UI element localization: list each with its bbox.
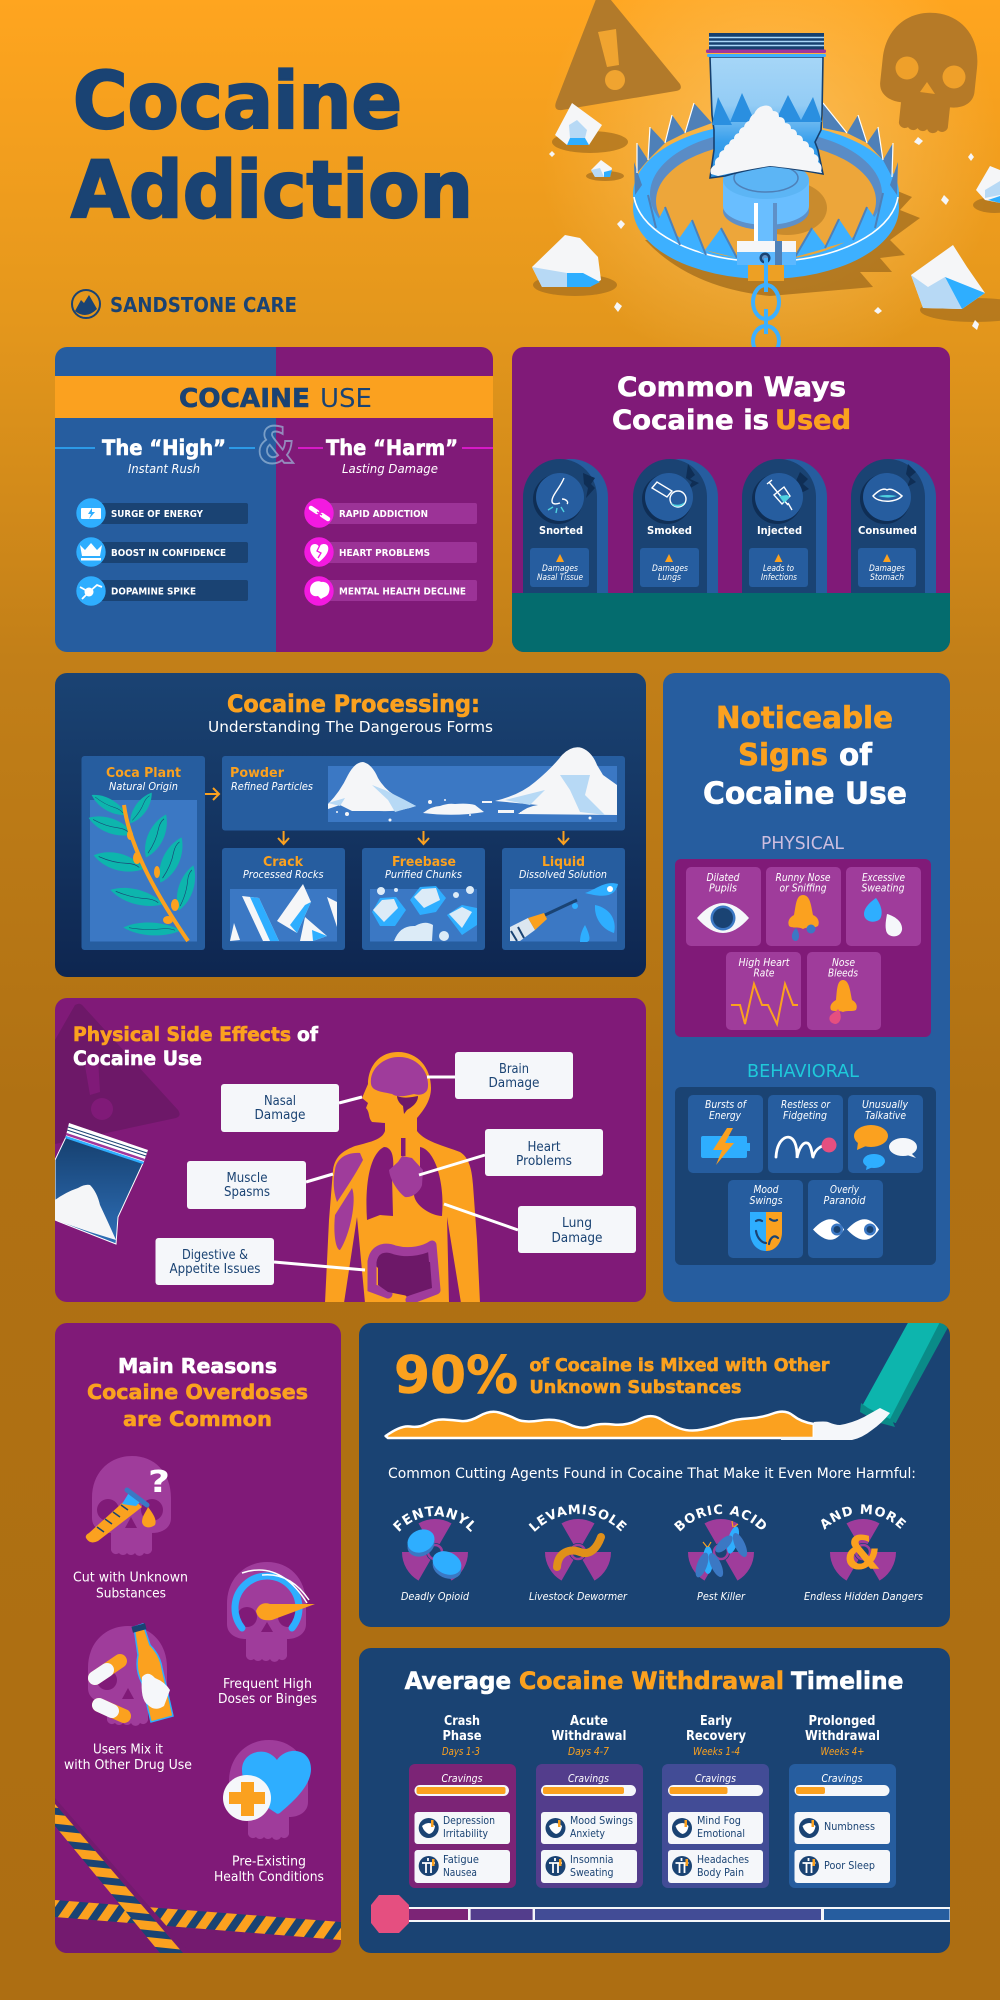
sign: high heart rate: Rate (754, 968, 774, 980)
sign: high heart rate (726, 952, 801, 1030)
card: crack: Processed Rocks (243, 869, 324, 881)
panel: noticeable signs (663, 673, 950, 1302)
sign: runny nose: or Sniffing (780, 882, 827, 894)
card: powder (222, 747, 625, 830)
reason: cut with unknown substances: Cut with Unknown (73, 1570, 188, 1586)
heading: physical side effects: of (297, 1023, 318, 1046)
card: injected: Infections (761, 573, 797, 583)
column: acute withdrawal: Days 4-7 (568, 1746, 609, 1758)
heading: overdose reasons: Cocaine Overdoses (87, 1380, 308, 1404)
sign: mood swings: Mood (754, 1184, 779, 1196)
sign: runny nose (766, 867, 841, 946)
column: crash phase (409, 1714, 516, 1888)
heading: noticeable signs (703, 701, 907, 812)
heading: physical side effects: Cocaine Use (73, 1047, 202, 1070)
illustration: powder line (386, 1408, 890, 1440)
label: nasal damage (221, 1084, 339, 1132)
icon: warning triangle backdrop (555, 0, 681, 110)
column: early recovery: Body Pain (697, 1866, 744, 1879)
agent: and more: Endless Hidden Dangers (804, 1591, 923, 1603)
heading: 90 percent: of Cocaine is Mixed with Other (530, 1355, 830, 1376)
agent: and more: AND MORE (821, 1504, 906, 1530)
column: acute withdrawal: Anxiety (570, 1827, 606, 1840)
icon: cutting straw (860, 1320, 952, 1427)
heading: common ways: Used (775, 405, 851, 436)
column: acute withdrawal (536, 1714, 643, 1888)
heading: overdose reasons (87, 1354, 308, 1431)
heading: common ways (612, 372, 851, 436)
group: physical signs (675, 859, 931, 1037)
group: behavioral signs (675, 1087, 936, 1265)
sign: dilated pupils (686, 867, 761, 946)
column: early recovery: Weeks 1-4 (693, 1746, 740, 1758)
card: consumed: Damages (869, 564, 906, 574)
label: brain damage: Damage (488, 1076, 540, 1091)
label: heart problems (485, 1129, 603, 1176)
column: crash phase: Crash (444, 1714, 480, 1729)
list: high effects: BOOST IN CONFIDENCE (111, 548, 226, 559)
heading: 90 percent: 90% (394, 1346, 518, 1406)
column: crash phase: Days 1-3 (442, 1746, 480, 1758)
heading: common ways: Common Ways (617, 372, 846, 403)
card: liquid: Liquid (542, 855, 585, 870)
column: early recovery: Cravings (695, 1773, 736, 1785)
card: smoked: Damages (652, 564, 689, 574)
heading: the high (55, 436, 255, 476)
heading: 90 percent (394, 1346, 830, 1406)
column: crash phase: Irritability (443, 1827, 489, 1840)
card: snorted (523, 459, 608, 593)
label: nasal damage: Damage (254, 1108, 306, 1123)
card: coca plant: Natural Origin (109, 781, 178, 793)
reason: pre-existing conditions: Health Conditions (214, 1870, 324, 1885)
card: snorted: Nasal Tissue (537, 573, 583, 583)
heading: cocaine use: USE (320, 384, 372, 414)
sign: excessive sweating: Excessive (862, 872, 905, 884)
logo: Sandstone Care (72, 290, 297, 318)
list: harm effects: MENTAL HEALTH DECLINE (339, 586, 466, 598)
reason: mixed with other drugs: Users Mix it (93, 1742, 163, 1758)
card: crack (222, 848, 345, 950)
sign: mood swings (728, 1180, 803, 1258)
panel: physical side effects (55, 998, 646, 1303)
label: digestive and appetite issues (156, 1238, 274, 1285)
card: freebase: Purified Chunks (385, 869, 462, 881)
sign: bursts of energy: Bursts of (705, 1099, 748, 1111)
sign: nose bleeds (807, 952, 881, 1030)
list: high effects: DOPAMINE SPIKE (111, 586, 196, 598)
column: crash phase: Depression (443, 1814, 495, 1827)
sign: overly paranoid (808, 1180, 883, 1258)
title: Addiction (71, 146, 473, 236)
label: heart problems: Heart (528, 1140, 560, 1155)
agent: levamisole: Livestock Dewormer (529, 1591, 628, 1603)
panel: cocaine processing (55, 673, 646, 977)
agent: fentanyl: FENTANYL (392, 1506, 474, 1532)
heading: 90 percent: Unknown Substances (530, 1377, 742, 1398)
card: powder: Powder (230, 766, 285, 781)
sign: dilated pupils: Pupils (709, 882, 737, 894)
label: muscle spasms (187, 1161, 306, 1209)
ground (512, 593, 950, 652)
column: crash phase: Cravings (442, 1773, 483, 1785)
column: acute withdrawal: Withdrawal (552, 1729, 626, 1744)
heading: withdrawal timeline (405, 1667, 904, 1695)
card: smoked (633, 459, 718, 593)
sign: restless or fidgeting (768, 1095, 843, 1173)
arrow: plant to powder (205, 788, 219, 800)
column: crash phase: Phase (442, 1729, 482, 1744)
sign: overly paranoid: Paranoid (824, 1195, 866, 1207)
sign: bursts of energy (688, 1095, 763, 1173)
label: muscle spasms: Muscle (226, 1171, 268, 1186)
panel: cocaine use (55, 347, 493, 652)
heading: the high: The “High” (102, 436, 226, 460)
sign: bursts of energy: Energy (709, 1110, 742, 1122)
agent: levamisole (528, 1504, 628, 1603)
panel: common ways cocaine is used (512, 347, 950, 652)
list: high effects (76, 498, 248, 606)
label: brain damage: Brain (499, 1062, 529, 1077)
illustration: rocks and crumbs (532, 103, 1000, 330)
card: powder: Refined Particles (231, 781, 313, 793)
icon: skull backdrop (875, 8, 982, 137)
card: liquid (502, 848, 625, 950)
column: prolonged withdrawal: Prolonged (808, 1714, 876, 1729)
sign: restless or fidgeting: Restless or (781, 1099, 831, 1111)
illustration: baggie of powder (706, 33, 826, 178)
sign: nose bleeds: Nose (832, 957, 855, 969)
sign: unusually talkative (848, 1095, 923, 1173)
heading: behavioral: BEHAVIORAL (747, 1061, 859, 1082)
card: injected: Injected (757, 524, 802, 537)
agent: and more (804, 1504, 923, 1603)
sign: high heart rate: High Heart (738, 957, 790, 969)
decoration: caution tape (55, 1798, 341, 1953)
agent: fentanyl (392, 1506, 474, 1603)
reason: mixed with other drugs: with Other Drug Use (64, 1758, 192, 1773)
panel: withdrawal timeline (359, 1648, 950, 1953)
column: early recovery: Emotional (697, 1827, 745, 1840)
connector lines (274, 1077, 518, 1270)
label: muscle spasms: Spasms (224, 1185, 270, 1200)
icon: faint warning triangle (55, 1004, 180, 1144)
title (71, 57, 473, 236)
column: acute withdrawal: Insomnia (570, 1853, 614, 1866)
card: snorted: Snorted (539, 524, 583, 537)
card: liquid: Dissolved Solution (519, 869, 607, 881)
label: lung damage: Damage (552, 1231, 602, 1246)
agent: boric acid (674, 1504, 766, 1603)
heading: noticeable signs: Signs (738, 738, 828, 773)
sign: mood swings: Swings (750, 1195, 783, 1207)
label: digestive and appetite issues: Appetite Issues (170, 1262, 261, 1277)
heading: common ways: Cocaine is (612, 405, 769, 436)
column: early recovery (662, 1714, 769, 1888)
reason: mixed with other drugs (64, 1623, 192, 1773)
reason: frequent high doses (218, 1562, 317, 1707)
label: digestive and appetite issues: Digestive & (182, 1248, 248, 1263)
card: consumed: Consumed (858, 524, 917, 537)
column: acute withdrawal: Mood Swings (570, 1814, 633, 1827)
panel: 90 percent cut (359, 1323, 950, 1627)
card: freebase (362, 848, 485, 950)
column: prolonged withdrawal: Cravings (822, 1773, 863, 1785)
list: harm effects (304, 498, 477, 606)
sign: restless or fidgeting: Fidgeting (783, 1110, 827, 1122)
hero background glow (500, 0, 1000, 347)
list: harm effects: RAPID ADDICTION (339, 509, 428, 520)
logo: Sandstone Care: SANDSTONE CARE (110, 293, 297, 317)
heading: withdrawal timeline: Cocaine Withdrawal (519, 1667, 784, 1695)
heading: noticeable signs: of (839, 738, 873, 773)
column: crash phase: Fatigue (443, 1853, 479, 1866)
reason: frequent high doses: Doses or Binges (218, 1692, 317, 1707)
column: prolonged withdrawal: Poor Sleep (824, 1859, 875, 1872)
heading: the harm (298, 436, 493, 476)
list: harm effects: HEART PROBLEMS (339, 548, 430, 559)
card: smoked: Lungs (658, 573, 682, 583)
card: consumed (851, 459, 936, 593)
card: freebase: Freebase (392, 855, 456, 870)
label: nasal damage: Nasal (264, 1094, 296, 1109)
heading: cocaine processing: Understanding The Dangerous Forms (208, 718, 493, 736)
label: heart problems: Problems (516, 1154, 572, 1169)
heading: physical: PHYSICAL (761, 833, 844, 854)
column: early recovery: Recovery (686, 1729, 746, 1744)
column: prolonged withdrawal: Withdrawal (805, 1729, 880, 1744)
column: prolonged withdrawal: Numbness (824, 1820, 875, 1833)
agent: levamisole: LEVAMISOLE (528, 1504, 627, 1532)
card: injected: Leads to (763, 564, 794, 574)
reason: cut with unknown substances: ? (148, 1465, 170, 1500)
agent: boric acid: Pest Killer (697, 1591, 746, 1603)
heading: overdose reasons: are Common (123, 1407, 272, 1431)
heading: noticeable signs: Noticeable (716, 701, 893, 736)
column: crash phase: Nausea (443, 1866, 477, 1879)
label: lung damage: Lung (562, 1216, 592, 1231)
list: high effects: SURGE OF ENERGY (111, 509, 204, 520)
card: snorted: Damages (542, 564, 579, 574)
column: acute withdrawal: Cravings (568, 1773, 609, 1785)
reason: cut with unknown substances (73, 1456, 188, 1602)
heading: the high: Instant Rush (128, 461, 200, 476)
reason: pre-existing conditions (214, 1740, 324, 1885)
heading: cocaine use: COCAINE (179, 384, 310, 414)
sign: nose bleeds: Bleeds (828, 968, 858, 980)
heading: the harm: Lasting Damage (342, 461, 438, 476)
heading: the harm: The “Harm” (326, 436, 458, 460)
card: consumed: Stomach (870, 573, 904, 583)
sign: excessive sweating (846, 867, 921, 946)
sign: unusually talkative: Unusually (862, 1099, 909, 1111)
agent: boric acid: BORIC ACID (674, 1504, 766, 1532)
icon: ampersand: & (257, 417, 295, 475)
reason: pre-existing conditions: Pre-Existing (232, 1854, 306, 1870)
heading: noticeable signs: Cocaine Use (703, 776, 907, 812)
column: acute withdrawal: Acute (570, 1714, 608, 1729)
heading: overdose reasons: Main Reasons (118, 1354, 277, 1378)
timeline bar (371, 1895, 950, 1933)
column: prolonged withdrawal (789, 1714, 896, 1888)
heading: withdrawal timeline: Average (405, 1667, 511, 1695)
sign: runny nose: Runny Nose (776, 872, 830, 884)
heading: cocaine processing (208, 690, 493, 736)
heading: withdrawal timeline: Timeline (791, 1667, 904, 1695)
agent: fentanyl: Deadly Opioid (401, 1591, 469, 1603)
reason: cut with unknown substances: Substances (96, 1586, 166, 1602)
heading: cocaine use (179, 384, 372, 414)
heading: physical side effects (73, 1023, 318, 1070)
sign: excessive sweating: Sweating (862, 882, 905, 894)
column: prolonged withdrawal: Weeks 4+ (820, 1746, 864, 1758)
illustration: bear trap (633, 103, 920, 356)
card: coca plant: Coca Plant (106, 766, 181, 781)
reason: frequent high doses: Frequent High (223, 1677, 312, 1692)
sign: dilated pupils: Dilated (706, 872, 740, 884)
icon: baggie (55, 1123, 148, 1244)
heading: cocaine processing: Cocaine Processing: (227, 690, 480, 718)
sign: unusually talkative: Talkative (865, 1110, 906, 1122)
column: early recovery: Mind Fog (697, 1814, 741, 1827)
arrows: powder to forms (278, 831, 569, 844)
card: injected (742, 459, 827, 593)
column: early recovery: Headaches (697, 1853, 749, 1866)
card: crack: Crack (263, 855, 303, 870)
agent: and more: & (844, 1526, 881, 1580)
panel: overdose reasons (55, 1323, 341, 1953)
illustration: human body (325, 1052, 480, 1303)
title: Cocaine (73, 57, 402, 147)
sign: overly paranoid: Overly (830, 1184, 860, 1196)
text: cutting agents intro: Common Cutting Agents Found in Cocaine That Make it Even More Harmful: (388, 1466, 916, 1482)
column: early recovery: Early (700, 1714, 732, 1729)
label: lung damage (518, 1206, 636, 1253)
label: brain damage (455, 1052, 573, 1099)
column: acute withdrawal: Sweating (570, 1866, 614, 1879)
card: smoked: Smoked (647, 524, 692, 537)
heading: physical side effects: Physical Side Effects (73, 1023, 291, 1046)
card: coca plant (82, 756, 205, 950)
